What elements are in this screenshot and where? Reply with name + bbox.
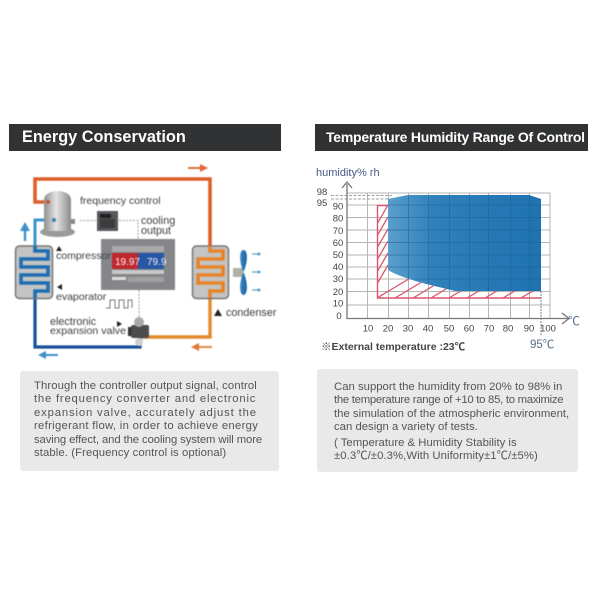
heading: Energy Conservation: Energy Conservation: [22, 128, 186, 146]
chart: temperature humidity range: [316, 167, 580, 353]
95C label: 95℃: [530, 339, 555, 351]
pipe: evaporator outlet to valve: [35, 293, 140, 347]
labels: frequency control: [80, 195, 161, 207]
description lines: expansion valve, accurately adjust the: [34, 407, 257, 419]
arrow: bottom blue: [38, 351, 58, 359]
heading: Temperature Humidity Range Of Control: [315, 124, 588, 151]
y axis labels: 0: [336, 311, 342, 322]
grid: [347, 193, 550, 318]
description lines: the simulation of the atmospheric environment,: [334, 408, 569, 420]
description lines: Can support the humidity from 20% to 98% in: [334, 381, 562, 393]
description lines: [334, 381, 569, 462]
controller panel: 79.9: [147, 257, 167, 268]
dashed limit lines: [331, 196, 392, 199]
y axis labels: [317, 187, 343, 322]
signal lines: [80, 220, 139, 318]
labels: electronic: [50, 316, 97, 328]
y axis labels: 30: [333, 274, 343, 285]
text panel: range of control description: [317, 369, 578, 472]
description lines: the frequency converter and electronic: [34, 393, 256, 405]
y axis labels: 10: [333, 298, 343, 310]
condenser fan: [233, 250, 261, 295]
description lines: stable. (Frequency control is optional): [34, 447, 226, 459]
condenser coil: [192, 246, 228, 298]
description lines: ±0.3℃/±0.3%,With Uniformity±1℃/±5%): [334, 450, 538, 462]
x axis labels: 20: [383, 324, 393, 334]
y axis labels: 95: [317, 198, 327, 209]
labels: output: [141, 225, 171, 237]
labels: evaporator: [56, 291, 107, 303]
labels: expansion valve: [50, 325, 126, 337]
y axis labels: 98: [317, 187, 327, 198]
labels: compressor: [56, 250, 111, 262]
description lines: can design a variety of tests.: [334, 421, 478, 433]
y axis labels: 80: [333, 214, 343, 224]
text panel: energy conservation description: [20, 371, 279, 471]
95 degree marker: [540, 291, 542, 335]
heading: Temperature Humidity Range Of Control: Temperature Humidity Range Of Control: [326, 129, 585, 145]
labels: [50, 195, 277, 337]
x axis labels: 80: [503, 324, 513, 334]
y axis labels: 40: [333, 262, 343, 273]
y axis labels: 90: [333, 202, 343, 212]
pipe: compressor suction line: [35, 220, 54, 250]
heading: Energy Conservation: [9, 124, 281, 151]
description lines: Through the controller output signal, control: [34, 380, 257, 392]
evaporator coil: [16, 246, 52, 298]
pipe: condenser outlet line: [141, 297, 210, 337]
y axis labels: 50: [333, 250, 343, 261]
y axis title: humidity% rh: [316, 167, 380, 179]
frequency control unit: [97, 211, 118, 231]
description lines: refrigerant flow, in order to achieve energy: [34, 420, 258, 432]
pipe: hot discharge line: [35, 179, 210, 250]
x axis labels: 70: [484, 324, 494, 334]
y axis labels: 60: [333, 238, 343, 249]
description lines: [34, 380, 262, 459]
compressor: [40, 191, 75, 237]
x axis labels: 30: [403, 324, 413, 334]
x axis labels: 50: [444, 324, 454, 334]
grid over area: [388, 196, 541, 291]
description lines: the temperature range of +10 to 85, to maximize: [334, 394, 563, 406]
arrow: top orange: [188, 164, 208, 172]
controller panel: [101, 239, 175, 290]
x axis unit: ℃: [568, 314, 580, 328]
description lines: ( Temperature & Humidity Stability is: [334, 436, 517, 448]
x axis labels: 90: [524, 324, 534, 334]
diagram: energy conservation refrigeration cycle: [14, 164, 277, 360]
expansion valve: [128, 317, 149, 346]
pulse signal: [106, 300, 132, 308]
hatched extended range: [376, 204, 540, 299]
controller panel: 19.97: [115, 257, 140, 268]
marker triangles: [56, 246, 222, 327]
arrow: up blue: [20, 222, 30, 241]
x axis labels: 60: [464, 324, 474, 334]
blue operating area: [388, 195, 541, 291]
x axis labels: [363, 324, 556, 334]
arrow: bottom orange: [191, 343, 212, 351]
x axis labels: 100: [540, 324, 556, 334]
description lines: saving effect, and the cooling system will more: [34, 434, 262, 446]
labels: condenser: [226, 307, 277, 319]
labels: cooling: [141, 215, 175, 227]
x axis labels: 40: [423, 324, 433, 334]
axes: [342, 182, 569, 324]
x axis labels: 10: [363, 324, 373, 334]
y axis labels: 70: [333, 226, 343, 237]
y axis labels: 20: [333, 287, 343, 298]
external temperature note: ※External temperature :23℃: [321, 341, 466, 353]
